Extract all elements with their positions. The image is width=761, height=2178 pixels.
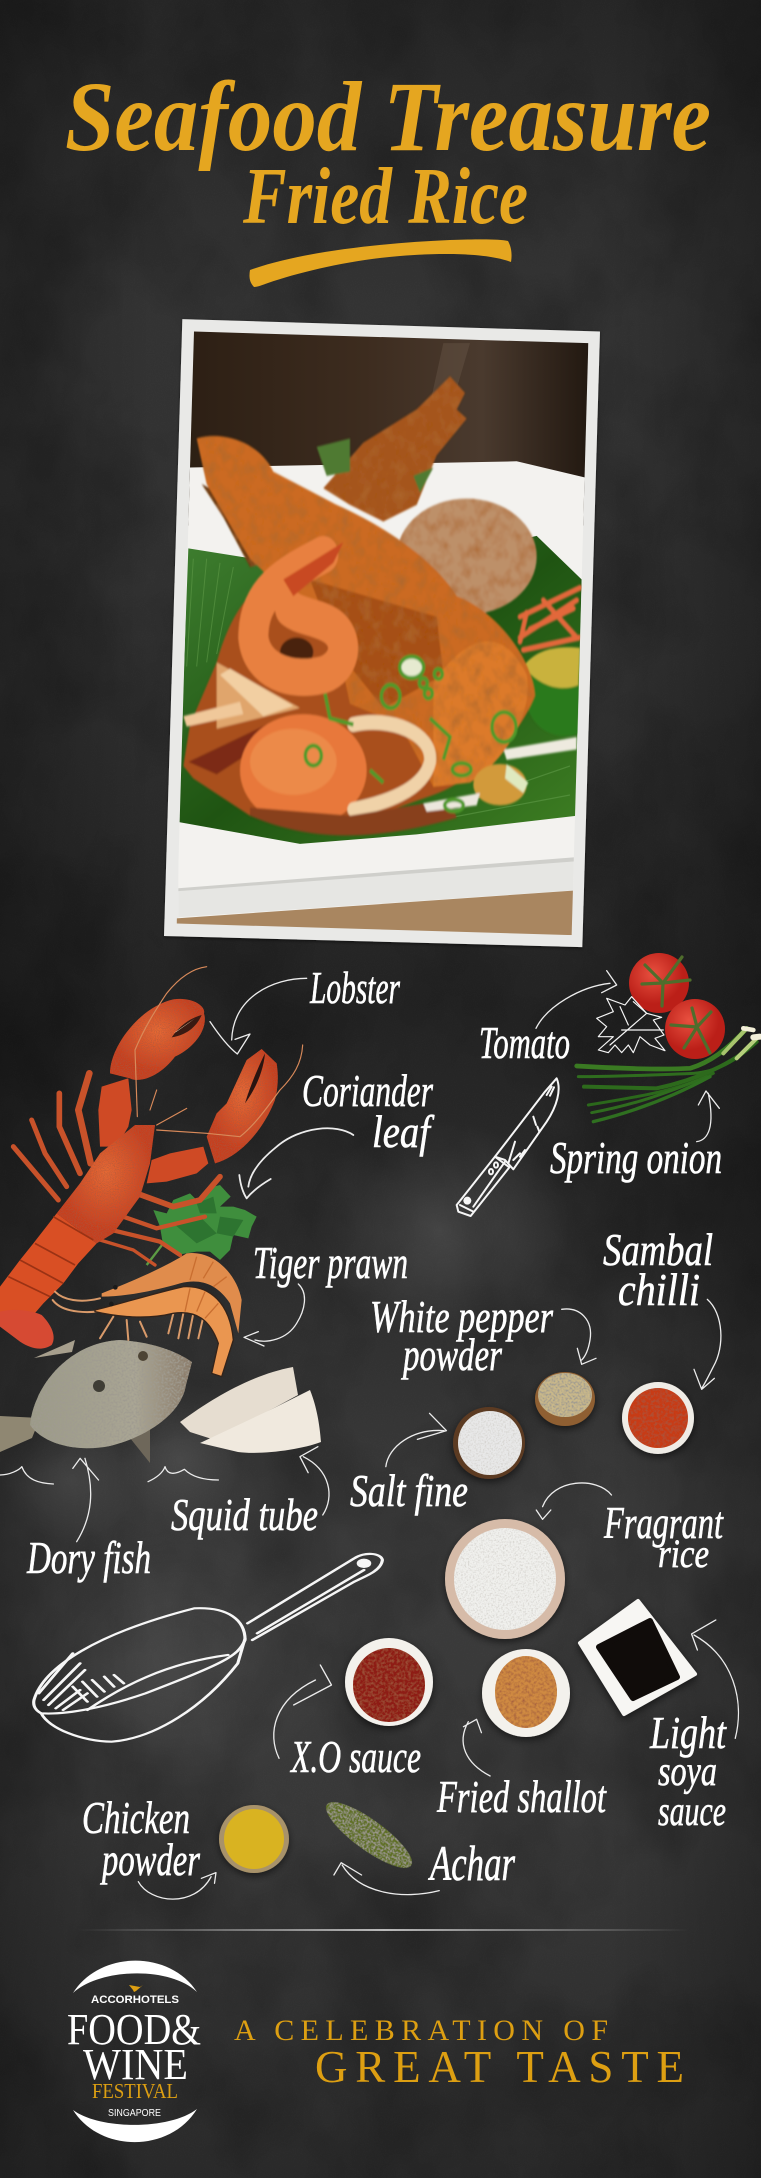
- label and arrow: X.O sauce: X.O sauce: [290, 1731, 421, 1782]
- label and arrow: Dory fish: Dory fish: [26, 1532, 151, 1583]
- chalk drawing: coriander sprig: [597, 997, 665, 1053]
- label and arrow: Tiger prawn: [244, 1237, 408, 1346]
- tagline: A CELEBRATION OF: [234, 2014, 608, 2047]
- tagline: [234, 2014, 684, 2092]
- label and arrow: Achar: Achar: [428, 1835, 515, 1891]
- title: Fried Rice: [242, 153, 528, 241]
- label and arrow: White pepper powder: White pepper: [370, 1291, 554, 1342]
- label and arrow: Sambal chilli: [603, 1224, 721, 1389]
- festival logo: FOOD&: [67, 2005, 201, 2054]
- ingredient: fried shallot bowl: [482, 1649, 570, 1737]
- title: [65, 61, 711, 241]
- label and arrow: Coriander leaf: leaf: [372, 1106, 435, 1157]
- label and arrow: Tomato: [479, 971, 617, 1068]
- ingredient: spring onion: [577, 1028, 760, 1122]
- label and arrow: Lobster: [210, 962, 401, 1054]
- ingredient: dory fish: [0, 1340, 192, 1463]
- label and arrow: Squid tube: Squid tube: [171, 1489, 318, 1540]
- label and arrow: Light soya sauce: [649, 1620, 738, 1835]
- label and arrow: Fragrant rice: rice: [658, 1531, 709, 1576]
- ingredient: X.O sauce bowl: [345, 1638, 433, 1726]
- ingredient: white pepper powder bowl: [535, 1372, 595, 1426]
- label and arrow: Salt fine: [350, 1413, 468, 1516]
- ingredient: squid tube: [180, 1367, 321, 1453]
- label and arrow: Light soya sauce: sauce: [658, 1789, 726, 1835]
- label and arrow: Tiger prawn: Tiger prawn: [253, 1237, 408, 1288]
- label and arrow: Fried shallot: [436, 1719, 607, 1822]
- label and arrow: X.O sauce: [274, 1665, 421, 1782]
- ingredient: fragrant rice bowl: [445, 1519, 565, 1639]
- label and arrow: Squid tube: [171, 1447, 329, 1540]
- festival logo: [67, 1961, 201, 2142]
- tagline: GREAT TASTE: [315, 2042, 684, 2092]
- footer divider: [78, 1929, 690, 1931]
- label and arrow: White pepper powder: powder: [401, 1329, 503, 1380]
- label and arrow: Tomato: Tomato: [479, 1017, 570, 1068]
- label and arrow: Spring onion: [550, 1091, 722, 1183]
- label and arrow: Achar: [334, 1835, 515, 1895]
- label and arrow: Chicken powder: [82, 1792, 216, 1899]
- ingredient: tiger prawn: [53, 1253, 242, 1377]
- label and arrow: Sambal chilli: Sambal: [603, 1224, 713, 1275]
- label and arrow: Sambal chilli: chilli: [618, 1264, 700, 1315]
- label and arrow: Chicken powder: powder: [100, 1834, 201, 1885]
- label and arrow: Fried shallot: Fried shallot: [436, 1771, 607, 1822]
- ingredient: light soya sauce dish: [580, 1601, 695, 1714]
- ingredient: sambal chilli bowl: [622, 1382, 694, 1454]
- label and arrow: Coriander leaf: [239, 1065, 435, 1198]
- label and arrow: Light soya sauce: Light: [649, 1707, 727, 1758]
- title underline brush stroke: [249, 239, 512, 287]
- label and arrow: Chicken powder: Chicken: [82, 1792, 190, 1843]
- ingredient: lobster: [0, 967, 303, 1349]
- label and arrow: White pepper powder: [370, 1291, 596, 1380]
- label and arrow: Lobster: Lobster: [309, 962, 401, 1013]
- photo of the dish in a white frame: [164, 319, 603, 947]
- chalk drawing: knife: [457, 1078, 559, 1216]
- label and arrow: Light soya sauce: soya: [658, 1749, 717, 1795]
- chalk drawing: frying pan: [34, 1554, 382, 1742]
- label and arrow: Fragrant rice: [536, 1483, 724, 1576]
- ingredient: chicken powder bowl: [219, 1805, 289, 1873]
- ingredient: achar pickle: [318, 1792, 420, 1878]
- ingredient: salt fine bowl: [453, 1407, 525, 1479]
- festival logo: FESTIVAL: [92, 2079, 178, 2103]
- label and arrow: Dory fish: [0, 1458, 218, 1583]
- ingredient: coriander leaf: [147, 1185, 257, 1265]
- label and arrow: Salt fine: Salt fine: [350, 1465, 468, 1516]
- label and arrow: Coriander leaf: Coriander: [302, 1065, 434, 1116]
- festival logo: SINGAPORE: [108, 2108, 161, 2119]
- festival logo: WINE: [83, 2040, 188, 2089]
- ingredient: tomato: [629, 953, 725, 1059]
- festival logo: ACCORHOTELS: [91, 1994, 179, 2006]
